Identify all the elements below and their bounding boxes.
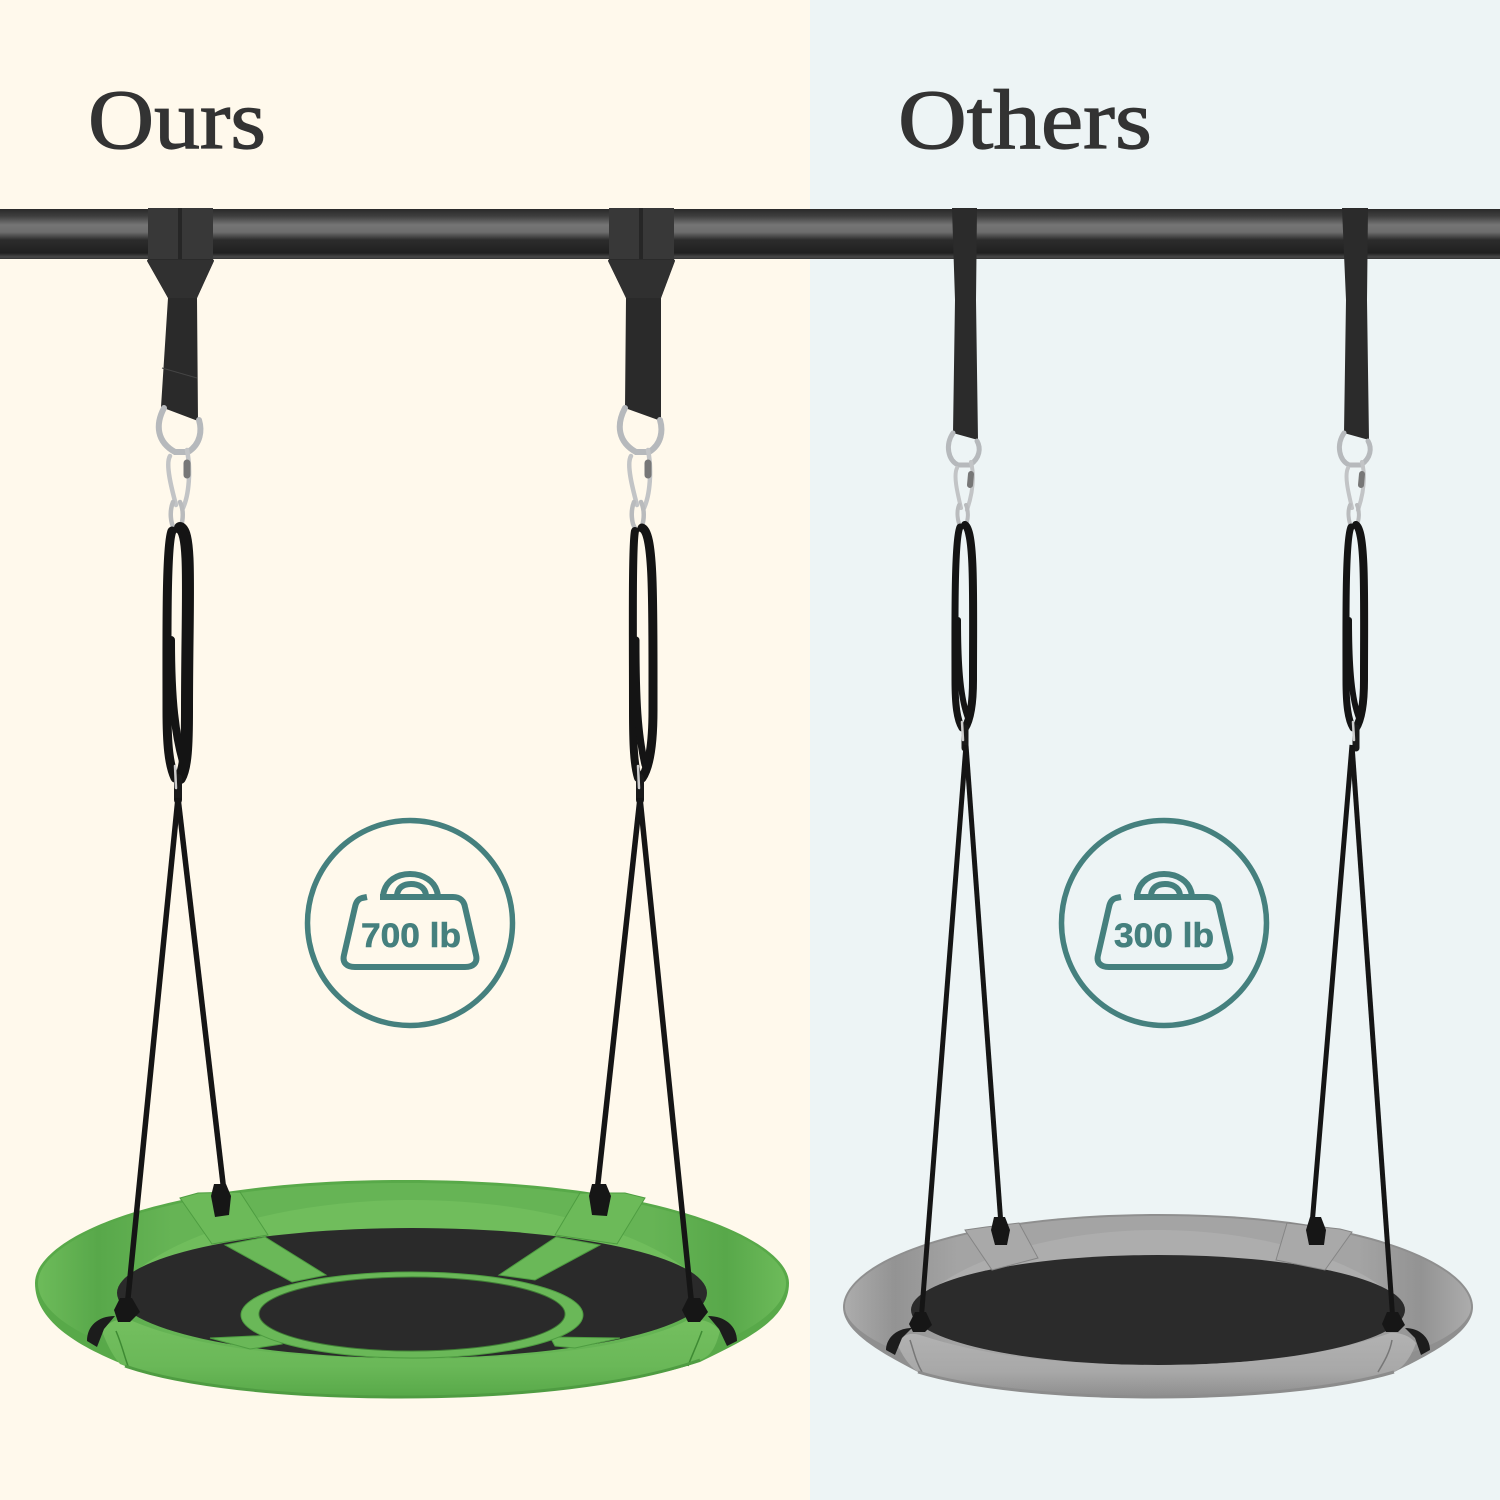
badge: 300 lb weight icon	[1062, 820, 1266, 1026]
badge ring	[308, 820, 512, 1026]
ring and carabiner	[948, 433, 979, 526]
seat straps	[210, 1237, 620, 1349]
heading: Others: Others	[898, 73, 1152, 167]
others left hanger: narrow strap, ring, carabiner, rope loop	[948, 208, 979, 748]
side hardware	[87, 1316, 737, 1347]
ropes: ours	[114, 798, 708, 1322]
outer rim	[843, 1214, 1473, 1398]
icon: weight	[1098, 874, 1230, 967]
rope loop	[955, 525, 973, 748]
ours right hanger: strap, ring, carabiner, rope loop	[608, 208, 675, 800]
badge ring	[1062, 820, 1266, 1026]
outer rim	[35, 1180, 789, 1398]
side hardware	[886, 1328, 1430, 1355]
top tabs	[965, 1223, 1352, 1270]
rope loop	[633, 528, 653, 800]
hanging bar	[0, 209, 1500, 259]
ours left hanger: strap, ring, carabiner, rope loop	[147, 208, 214, 800]
weight value: 700 lb	[361, 917, 461, 955]
narrow strap	[952, 208, 978, 440]
wide strap	[147, 208, 214, 421]
wide strap	[608, 208, 675, 421]
panel: ours background	[0, 0, 810, 1500]
narrow strap	[1342, 208, 1369, 440]
ring and carabiner	[159, 408, 200, 528]
front rim	[897, 1333, 1416, 1397]
rope loop	[167, 528, 188, 800]
grey swing seat	[843, 1214, 1473, 1398]
others right hanger: narrow strap, ring, carabiner, rope loop	[1339, 208, 1370, 748]
ropes: others	[909, 745, 1405, 1332]
black mesh	[117, 1228, 707, 1358]
badge: 700 lb weight icon	[308, 820, 512, 1026]
rope loop	[1346, 525, 1364, 748]
panel: others background	[810, 0, 1500, 1500]
weight value: 300 lb	[1114, 917, 1214, 955]
front rim	[102, 1319, 720, 1397]
ring and carabiner	[620, 408, 661, 528]
green swing seat	[35, 1180, 789, 1398]
ring and carabiner	[1339, 433, 1370, 526]
upper inner wall	[117, 1200, 707, 1300]
icon: weight	[344, 874, 476, 967]
centre ring	[241, 1272, 583, 1358]
heading: Ours: Ours	[88, 73, 266, 167]
top tabs	[180, 1192, 645, 1244]
black mesh	[911, 1255, 1405, 1365]
upper inner wall	[912, 1230, 1405, 1317]
